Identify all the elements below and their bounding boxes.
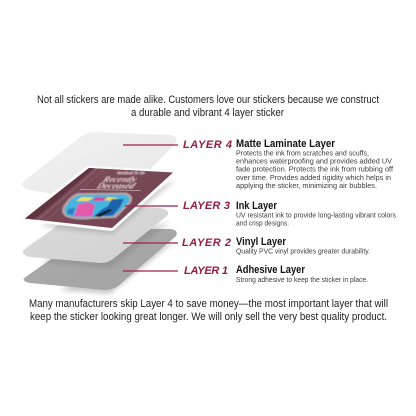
book spine: [25, 168, 94, 220]
layer 2 label with arrow: LAYER 2: [182, 237, 231, 249]
layer 3 description: and crisp designs.: [236, 218, 289, 228]
layer 3 description: UV resistant ink to provide long-lasting vibrant colors: [236, 210, 396, 220]
layer 4 description: Matte Laminate Layer: [236, 138, 336, 150]
layer 4 description: [236, 138, 394, 190]
layer 1 description: Adhesive Layer: [236, 264, 306, 276]
layer 4 label with arrow: [123, 139, 232, 151]
layer 3 label with arrow: LAYER 3: [183, 200, 230, 212]
layer 3 description: Ink Layer: [236, 200, 278, 212]
sticker: vinyl layer: [23, 204, 170, 268]
layer 2 label with arrow: [123, 237, 231, 249]
layer 4 description: enhances waterproofing and provides added UV: [236, 156, 393, 166]
layer 4 description: fade protection. Protects the ink from rubbing off: [236, 164, 394, 174]
layer 4 label with arrow: LAYER 4: [183, 139, 232, 151]
layer 1 label with arrow: [123, 265, 228, 277]
book artwork: [62, 192, 132, 220]
sticker: matte laminate layer: [22, 132, 177, 203]
sticker: ink layer, book cover: [21, 166, 177, 234]
layer 3 label with arrow: [125, 200, 230, 212]
intro text: a durable and vibrant 4 layer sticker: [131, 107, 284, 119]
book title: Recently: [100, 175, 140, 184]
layer 2 description: [236, 236, 370, 256]
layer 2 description: Quality PVC vinyl provides greater durability.: [236, 246, 370, 256]
book title: [94, 171, 146, 190]
layer 1 label with arrow: LAYER 1: [184, 265, 228, 277]
layer 1 description: [236, 264, 368, 284]
book cover: [25, 168, 173, 228]
layer 1 description: Strong adhesive to keep the sticker in place.: [236, 275, 368, 284]
sticker: adhesive layer: [24, 229, 177, 294]
book white border: [21, 166, 177, 231]
layer 4 description: over time. Provides added rigidity which helps in: [236, 173, 391, 182]
layer 2 description: Vinyl Layer: [236, 236, 287, 248]
layer 3 description: [236, 200, 396, 228]
book title: Deceased: [94, 181, 138, 190]
intro text: [37, 94, 380, 119]
book title: Handbook for the: [115, 171, 146, 176]
layer 4 description: applying the sticker, minimizing air bubbles.: [236, 181, 377, 190]
layer 4 description: Protects the ink from scratches and scuffs,: [236, 148, 369, 158]
closing text: [29, 298, 388, 323]
